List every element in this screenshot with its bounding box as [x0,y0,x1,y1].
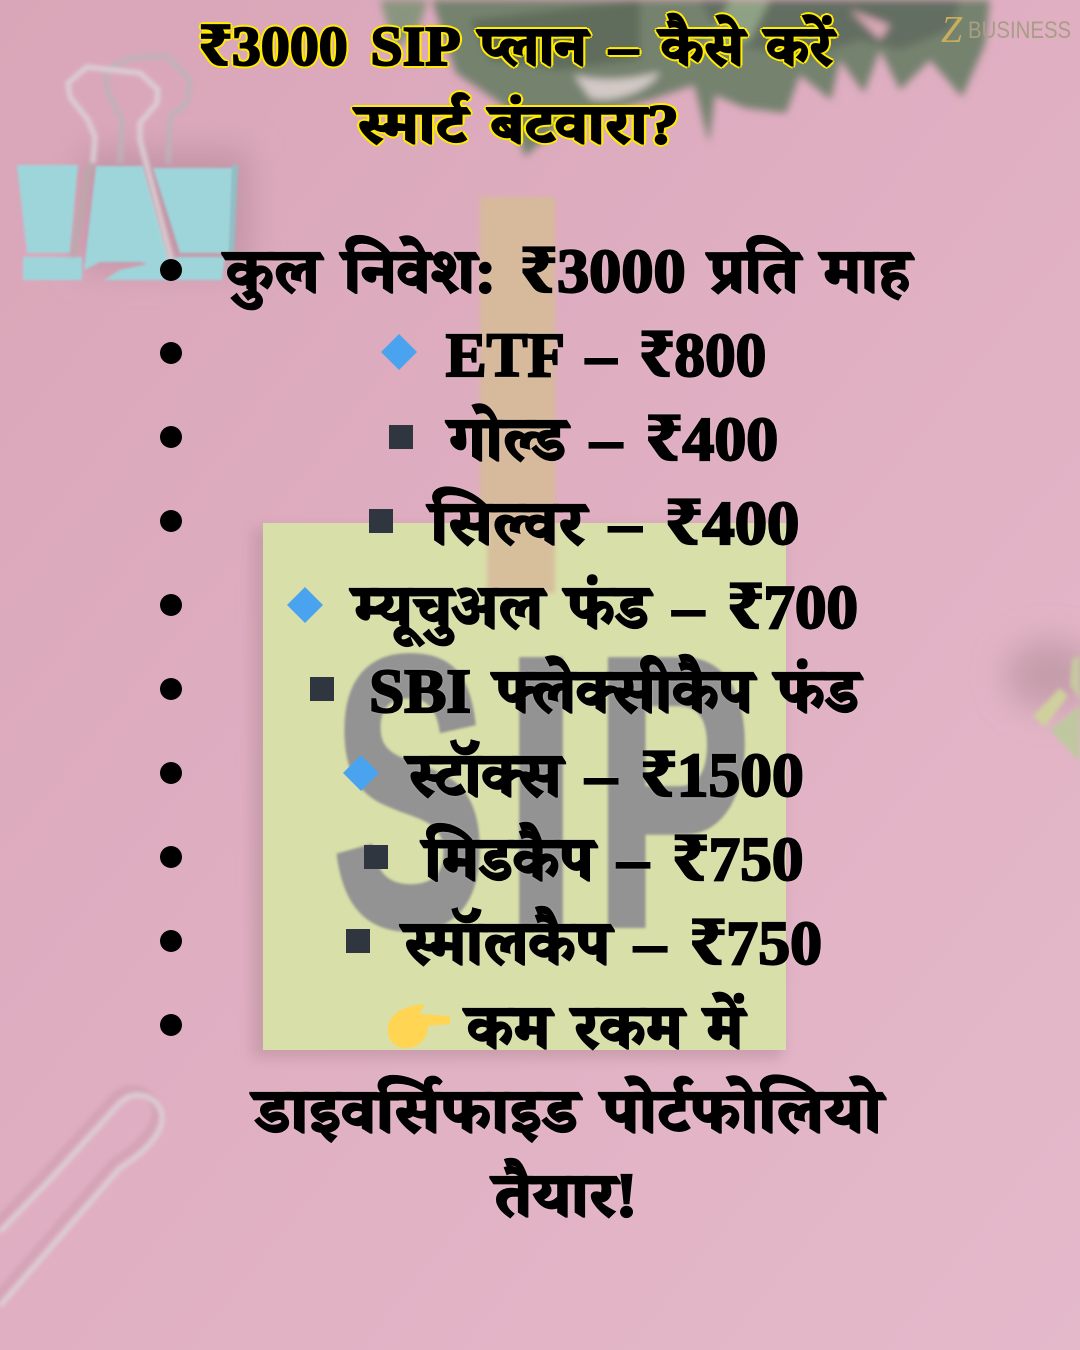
paperclip [0,1089,162,1306]
conclusion line 2: डाइवर्सिफाइड पोर्टफोलियो [254,1078,882,1146]
sticky note shadow [252,528,782,1058]
dark square icons [310,425,413,953]
blue diamond icons [287,334,417,791]
SIP note lettering: I [503,576,579,1007]
icon: pointing hand [388,1004,450,1048]
logo watermark: BUSINESS [968,17,1071,44]
list line: silver: सिल्वर – ₹400 [431,490,799,558]
SIP note lettering: S [332,576,487,1007]
logo watermark: Z [941,9,962,51]
list line: midcap: मिडकैप – ₹750 [425,826,803,894]
title line 1: ₹3000 SIP प्लान – कैसे करें [199,16,833,78]
list line: stocks: स्टॉक्स – ₹1500 [408,742,804,810]
list line: SBI flexicap: SBI फ्लेक्सीकैप फंड [369,658,859,726]
conclusion line 3: तैयार! [494,1162,638,1230]
list line: mutual fund: म्यूचुअल फंड – ₹700 [354,574,858,642]
logo watermark [941,9,1071,51]
list line: smallcap: स्मॉलकैप – ₹750 [404,910,822,978]
SIP note lettering [332,576,751,1007]
right-edge object [1005,640,1080,762]
conclusion line 1: कम रकम में [467,994,743,1062]
list line: ETF: ETF – ₹800 [446,322,766,390]
bullet dots [160,259,182,1036]
SIP note lettering: P [594,576,751,1007]
list line: total investment: कुल निवेश: ₹3000 प्रति माह [226,238,910,306]
binder clip [17,56,250,280]
plant [380,0,990,157]
sticky note [263,523,786,1050]
title line 2: स्मार्ट बंटवारा? [357,94,679,156]
list line: gold: गोल्ड – ₹400 [450,406,778,474]
clothespin [480,197,555,593]
